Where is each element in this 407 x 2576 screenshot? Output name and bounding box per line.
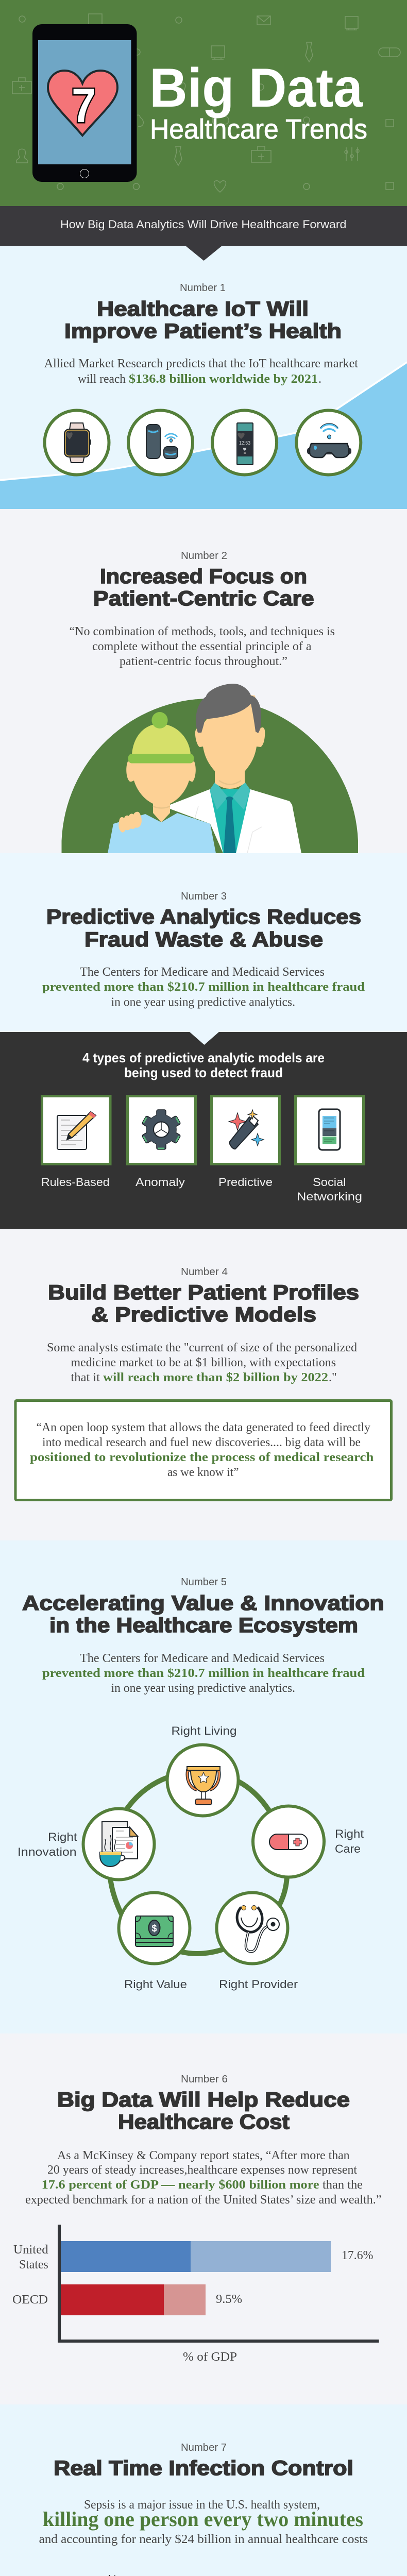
body text: killing one person every two minutes: [43, 2507, 363, 2531]
heading: [64, 298, 342, 343]
body text: and accounting for nearly $24 billion in annual healthcare costs: [39, 2533, 368, 2546]
heading: Increased Focus on: [100, 565, 307, 588]
bar chart: % of GDP: % of GDP: [183, 2350, 237, 2364]
body text: [39, 2498, 368, 2546]
body text: 17.6 percent of GDP — nearly $600 billion more: [42, 2178, 319, 2192]
node: right provider: [216, 1893, 298, 1991]
callout: quote box: [15, 1400, 392, 1500]
icon: fitness band: 12:53: [239, 440, 250, 446]
body quote: “No combination of methods, tools, and techniques is: [69, 625, 335, 638]
node: right innovation: [18, 1808, 155, 1879]
body quote: complete without the essential principle of a: [92, 640, 312, 653]
icon: stopwatch with bacteria: [99, 2573, 308, 2576]
heading: Fraud Waste & Abuse: [84, 928, 323, 951]
node: right care: Right: [335, 1827, 364, 1840]
heading: Healthcare IoT Will: [97, 298, 309, 320]
body text: in one year using predictive analytics.: [111, 995, 295, 1009]
body text: .": [329, 1371, 337, 1384]
card: rules-based: [41, 1096, 110, 1189]
callout: quote box: positioned to revolutionize the process of medical research: [30, 1451, 374, 1464]
heading: [22, 1592, 384, 1637]
panel: number 5 value and innovation: [0, 1540, 407, 2033]
body text: medicine market to be at $1 billion, with expectations: [71, 1356, 336, 1369]
heading: [46, 906, 361, 951]
bar chart: % of GDP: [12, 2225, 379, 2364]
card: predictive: Predictive: [218, 1176, 273, 1189]
number label: Number 3: [181, 891, 227, 902]
heading: Improve Patient’s Health: [64, 320, 342, 343]
body text: $136.8 billion worldwide by 2021: [129, 372, 318, 386]
arrow: pointer into band: [190, 1032, 219, 1045]
card: social networking: Social: [313, 1176, 346, 1189]
node: right provider: Right Provider: [219, 1978, 298, 1991]
body quote: [69, 625, 335, 668]
heading: Accelerating Value & Innovation: [22, 1592, 384, 1615]
icon: smartphone with heart: 7: [72, 78, 96, 132]
body text: prevented more than $210.7 million in healthcare fraud: [42, 1667, 365, 1680]
body text: that it: [71, 1371, 100, 1384]
body text: will reach more than $2 billion by 2022: [103, 1371, 328, 1384]
heading: [93, 565, 314, 610]
node: right value: [118, 1893, 190, 1991]
bar: OECD: [12, 2284, 242, 2315]
cycle diagram: [18, 1724, 364, 1991]
heading: Patient-Centric Care: [93, 587, 314, 610]
header panel: [0, 0, 407, 206]
body text: [47, 1341, 357, 1384]
panel: number 1 healthcare IoT: [0, 246, 407, 509]
heading: Big Data Will Help Reduce: [57, 2089, 350, 2111]
heading: Predictive Analytics Reduces: [46, 906, 361, 928]
illustration: doctor with patient: [62, 684, 358, 853]
node: right innovation: Innovation: [18, 1845, 77, 1858]
bar: United States: States: [19, 2258, 48, 2272]
body text: 20 years of steady increases,healthcare expenses now represent: [47, 2163, 357, 2177]
number label: Number 2: [181, 550, 227, 562]
card: social networking: Networking: [297, 1190, 362, 1203]
body text: Allied Market Research predicts that the IoT healthcare market: [44, 357, 358, 370]
callout: quote box: “An open loop system that allows the data generated to feed directly: [36, 1421, 370, 1434]
card: social networking: [296, 1096, 364, 1203]
bar: OECD: OECD: [12, 2293, 48, 2307]
card: anomaly: [128, 1096, 196, 1189]
body text: The Centers for Medicare and Medicaid Services: [80, 1652, 325, 1665]
arrow: pointer from subtitle band: [185, 246, 222, 261]
node: right value: Right Value: [124, 1978, 187, 1991]
title: Big Data: [149, 57, 363, 118]
card: rules-based: Rules-Based: [41, 1176, 110, 1189]
body text: [44, 357, 358, 386]
panel: number 6 healthcare cost: [0, 2033, 407, 2404]
doctor: [170, 684, 301, 853]
number label: Number 1: [180, 282, 226, 294]
node: right living: Right Living: [171, 1724, 237, 1737]
heading: in the Healthcare Ecosystem: [49, 1614, 358, 1637]
card: predictive: [211, 1096, 279, 1189]
bar: OECD: 9.5%: [216, 2293, 242, 2306]
body text: Sepsis is a major issue in the U.S. health system,: [84, 2498, 320, 2512]
title: [149, 57, 367, 145]
subtitle band: [0, 206, 407, 246]
band heading: being used to detect fraud: [124, 1065, 283, 1080]
node: right value: $: [151, 1923, 157, 1934]
card: anomaly: Anomaly: [135, 1176, 185, 1189]
subtitle band: How Big Data Analytics Will Drive Healthcare Forward: [60, 218, 346, 231]
title: Healthcare Trends: [150, 114, 367, 145]
band heading: [82, 1050, 325, 1080]
heading: Healthcare Cost: [118, 2111, 290, 2133]
body text: than the: [323, 2178, 363, 2192]
body text: Some analysts estimate the "current of size of the personalized: [47, 1341, 357, 1354]
bar: United States: United: [13, 2243, 48, 2257]
icon: smartphone with heart: [32, 24, 137, 182]
node: right care: Care: [335, 1842, 361, 1855]
body text: As a McKinsey & Company report states, “After more than: [57, 2149, 350, 2162]
bar: United States: 17.6%: [342, 2249, 373, 2262]
node: right care: [253, 1806, 364, 1877]
number label: Number 7: [181, 2442, 227, 2453]
panel: number 7 infection control: [0, 2404, 407, 2576]
icon: VR goggles with wifi: [296, 410, 361, 475]
callout: quote box: into medical research and fuel new discoveries.... big data will be: [42, 1436, 361, 1449]
callout: quote box: as we know it”: [167, 1466, 239, 1479]
panel: number 3 fraud reduction: [0, 853, 407, 1032]
heading: [57, 2089, 350, 2133]
heading: Build Better Patient Profiles: [48, 1281, 359, 1304]
body quote: patient-centric focus throughout.”: [120, 655, 287, 668]
body text: [42, 965, 365, 1009]
panel: number 4 patient profiles: [0, 1229, 407, 1540]
body text: prevented more than $210.7 million in healthcare fraud: [42, 980, 365, 994]
body text: [42, 1652, 365, 1695]
panel: 4 types of predictive models: [0, 1032, 407, 1229]
panel: number 2 patient-centric care: [0, 509, 407, 853]
icon: smart watch: [44, 410, 109, 475]
number label: Number 5: [181, 1577, 227, 1588]
heading: Real Time Infection Control: [54, 2457, 353, 2480]
number label: Number 6: [181, 2074, 228, 2085]
body text: in one year using predictive analytics.: [111, 1682, 295, 1695]
node: right innovation: Right: [48, 1831, 77, 1843]
bar: United States: [13, 2241, 373, 2272]
icon: smart speaker: [128, 410, 193, 475]
hand on shoulder: [118, 812, 142, 833]
node: right living: [167, 1724, 238, 1816]
body text: .: [318, 372, 321, 386]
body text: expected benchmark for a nation of the United States’ size and wealth.”: [25, 2193, 381, 2207]
body text: [25, 2149, 381, 2207]
body text: will reach: [78, 372, 126, 386]
icon: fitness band: [212, 410, 277, 475]
band heading: 4 types of predictive analytic models are: [82, 1050, 325, 1065]
patient: [108, 712, 216, 853]
body text: The Centers for Medicare and Medicaid Services: [80, 965, 325, 979]
number label: Number 4: [181, 1266, 228, 1278]
heading: & Predictive Models: [91, 1303, 316, 1326]
heading: [48, 1281, 359, 1326]
